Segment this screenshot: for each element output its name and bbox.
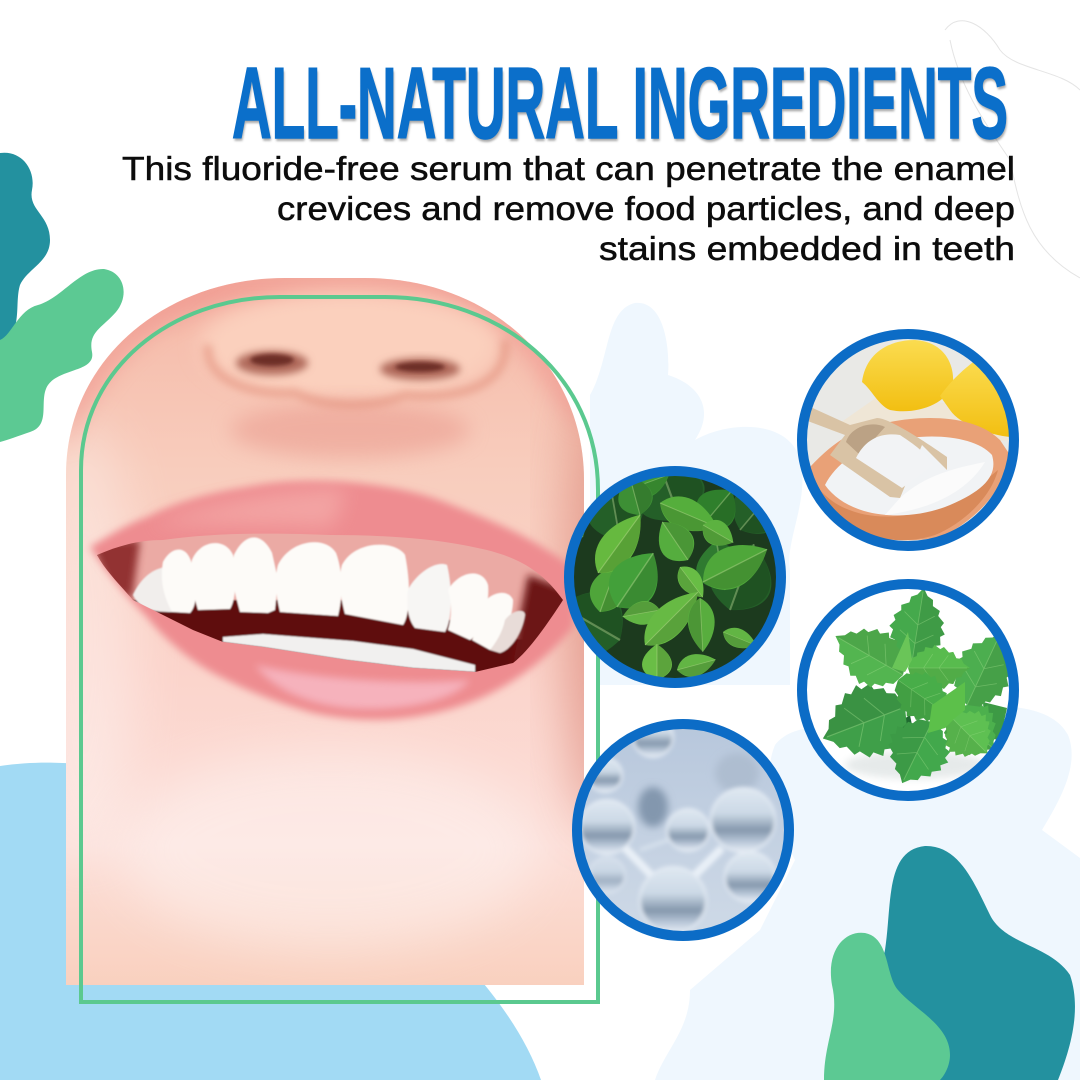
mouth interior xyxy=(97,534,563,672)
ingredient circle: tea leaves xyxy=(564,466,786,688)
lower teeth xyxy=(223,634,475,672)
blob: bottom-left light blue xyxy=(0,763,541,1080)
ingredient circle: molecules xyxy=(575,717,795,942)
subtitle text block: stains embedded in teeth xyxy=(599,230,1015,267)
subtitle text block xyxy=(122,150,1015,267)
blob: bottom-right green xyxy=(824,933,950,1080)
nose xyxy=(200,290,500,400)
subtitle text block: This fluoride-free serum that can penetrate the enamel xyxy=(122,150,1015,187)
photo: smiling mouth in arch xyxy=(66,278,584,985)
blob: bottom-right teal xyxy=(880,846,1075,1080)
subtitle text block: crevices and remove food particles, and deep xyxy=(277,190,1015,227)
background blob: lower light blue xyxy=(655,706,1080,1080)
blob: top-left teal xyxy=(0,153,50,350)
lips xyxy=(90,481,577,720)
upper teeth xyxy=(133,537,525,653)
green arch outline xyxy=(81,297,598,1002)
decorative thin outline xyxy=(945,21,1080,278)
blob: top-left green xyxy=(0,269,124,442)
ingredient circle: lemon and citric acid bowl xyxy=(800,334,1020,550)
ingredient circle: mint xyxy=(802,584,1028,797)
background blob: upper light blue xyxy=(590,303,802,685)
